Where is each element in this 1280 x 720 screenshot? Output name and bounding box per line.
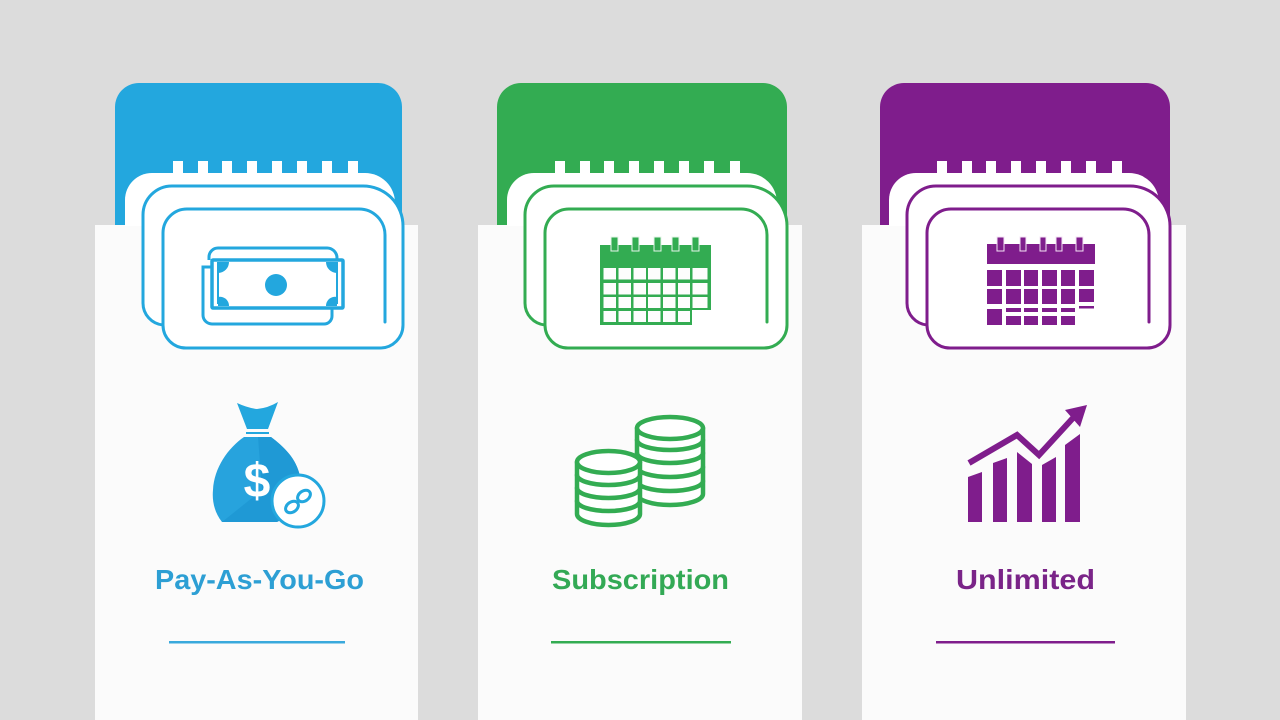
- panel: Unlimited: [862, 83, 1186, 720]
- icon: calendar frame: [125, 161, 403, 348]
- icon: money bag with coin: [213, 402, 324, 527]
- heading: Subscription: [552, 564, 729, 595]
- icon: money bag with coin: $: [244, 455, 271, 508]
- icon: calendar: [987, 237, 1095, 325]
- white card: [862, 225, 1186, 720]
- coloured tab: [497, 83, 787, 226]
- divider: [551, 641, 731, 644]
- panel: Pay-As-You-Go: [95, 83, 418, 720]
- icon: growth bar chart with arrow: [968, 405, 1087, 522]
- coloured tab: [880, 83, 1170, 226]
- heading: Unlimited: [956, 564, 1095, 595]
- divider: [169, 641, 345, 644]
- coloured tab: [115, 83, 402, 226]
- panel: Subscription: [478, 83, 802, 720]
- divider: [936, 641, 1115, 644]
- icon: calendar: [600, 237, 711, 325]
- white card: [95, 225, 418, 720]
- white card: [478, 225, 802, 720]
- icon: calendar frame: [889, 161, 1170, 348]
- icon: calendar frame: [507, 161, 787, 348]
- heading: Pay-As-You-Go: [155, 564, 364, 595]
- icon: banknotes: [203, 248, 343, 324]
- icon: coin stacks: [577, 417, 703, 525]
